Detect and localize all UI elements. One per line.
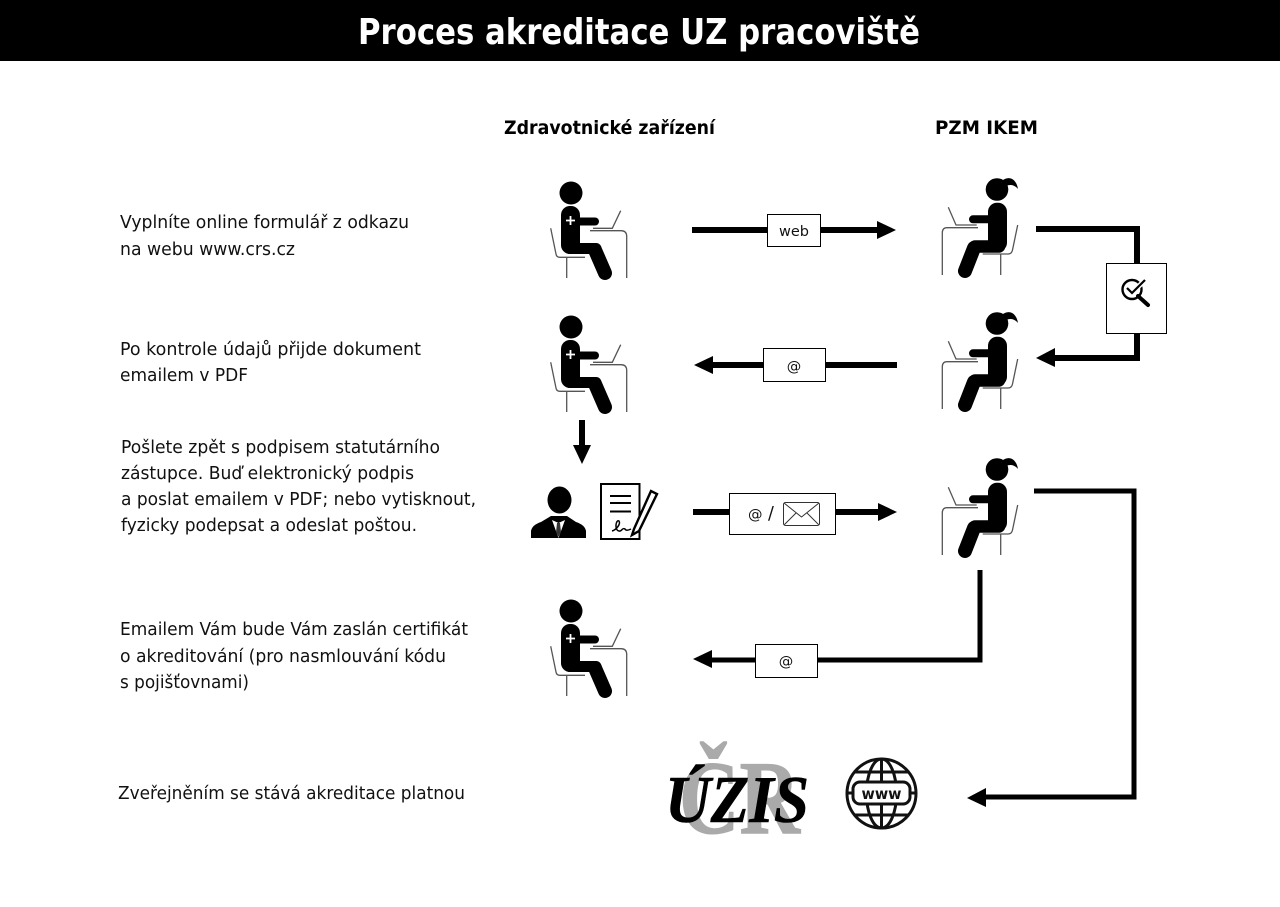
arrow: signed document to PZM: / [768, 504, 774, 524]
icon: healthcare worker row 2 [551, 316, 627, 412]
text: step 2: Po kontrole údajů přijde dokument [120, 340, 421, 360]
icon: statutory representative [531, 486, 586, 538]
arrow: certificate by email: @ [779, 654, 793, 670]
text: step 2: emailem v PDF [120, 366, 248, 386]
text: step 4: o akreditování (pro nasmlouvání kódu [120, 647, 446, 667]
logo: ÚZIS ČR: ÚZIS [665, 763, 809, 837]
arrow: signed document to PZM [693, 494, 897, 534]
icon: check box [1106, 264, 1166, 334]
text: step 4: Emailem Vám bude Vám zaslán certifikát [120, 620, 468, 640]
icon: signed document [601, 484, 657, 539]
text: step 5: Zveřejněním se stává akreditace platnou [118, 784, 465, 804]
text: step 3: a poslat emailem v PDF; nebo vytisknout, [121, 490, 476, 510]
title [0, 0, 1280, 61]
arrow: to check and back [1036, 229, 1137, 367]
arrow: down [573, 420, 591, 464]
icon: PZM worker row 2 [942, 312, 1018, 409]
icon: healthcare worker row 1 [551, 182, 627, 278]
icon: PZM worker row 1 [942, 178, 1018, 275]
arrow: web [692, 214, 896, 246]
arrow: web: web [779, 224, 809, 240]
text: step 3: zástupce. Buď elektronický podpis [121, 464, 414, 484]
arrow: publication [967, 491, 1134, 807]
icon: healthcare worker row 4 [551, 600, 627, 696]
text: step 4: s pojišťovnami) [120, 673, 249, 693]
arrow: email back [694, 348, 897, 382]
arrow: signed document to PZM: @ [748, 507, 762, 523]
heading: PZM IKEM: PZM IKEM [935, 117, 1038, 139]
title: Proces akreditace UZ pracoviště [358, 12, 920, 53]
icon: www globe [847, 759, 916, 828]
text: step 3: fyzicky podepsat a odeslat poštou. [121, 516, 417, 536]
logo: ÚZIS ČR: ČR [679, 739, 801, 856]
icon: www globe: www [862, 785, 902, 803]
text: step 1: na webu www.crs.cz [120, 240, 295, 260]
icon: PZM worker row 3 [942, 458, 1018, 555]
text: step 1: Vyplníte online formulář z odkazu [120, 213, 409, 233]
text: step 3: Pošlete zpět s podpisem statutárního [121, 438, 440, 458]
arrow: certificate by email [693, 570, 980, 678]
heading: Zdravotnické zařízení: Zdravotnické zařízení [504, 117, 716, 139]
arrow: email back: @ [787, 359, 801, 375]
